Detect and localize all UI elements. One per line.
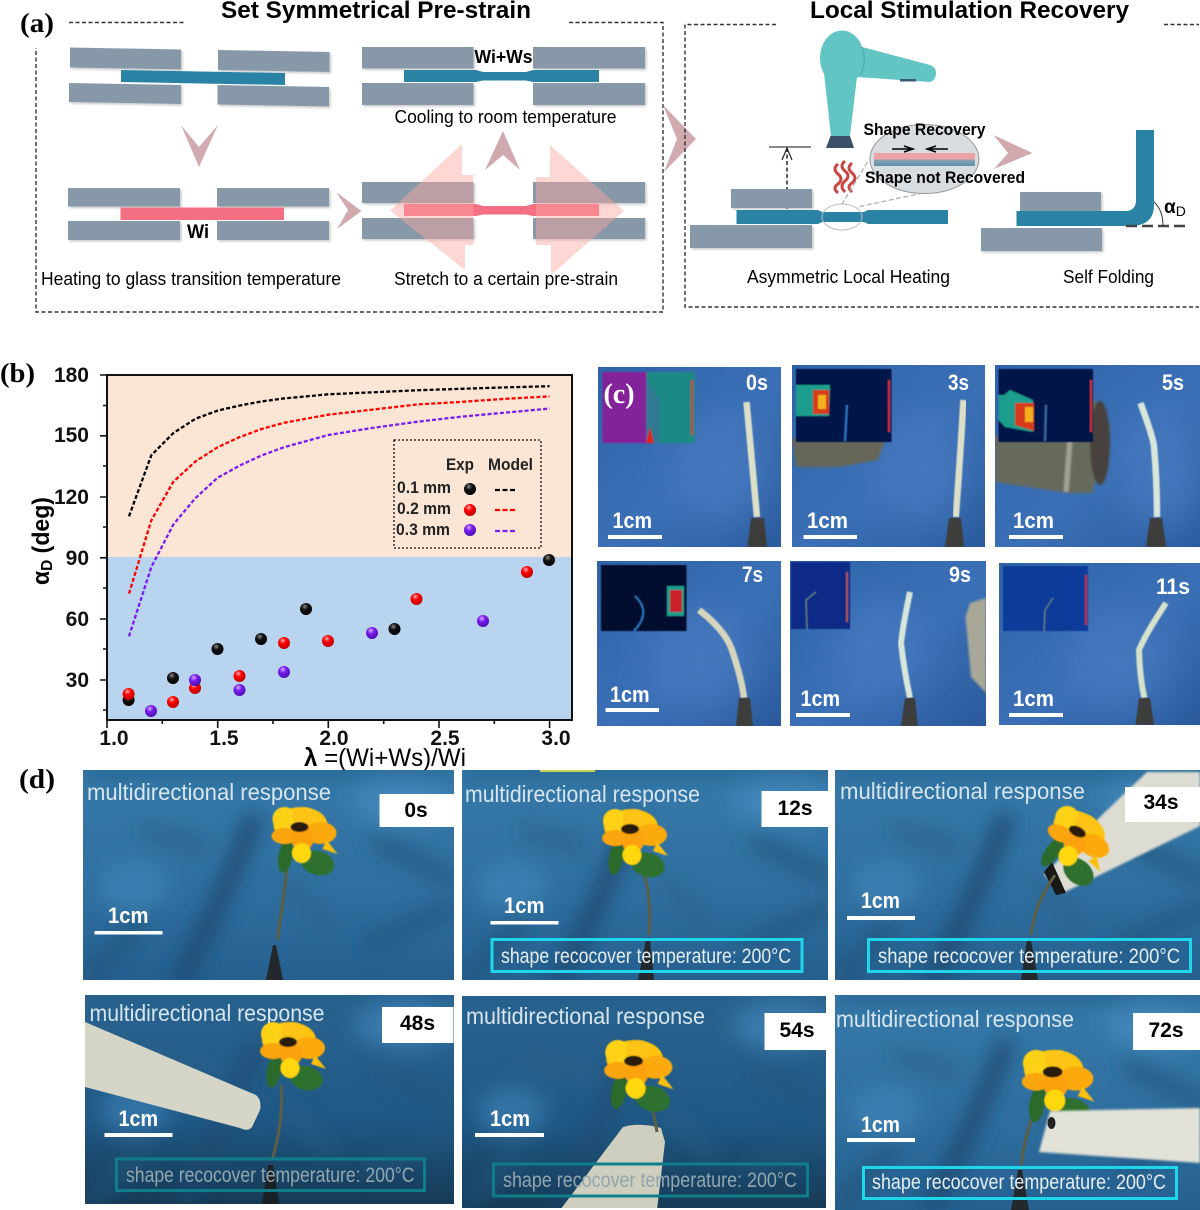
experimental points: 0.2 mm: [123, 566, 533, 708]
panel c: photo 9s: [790, 561, 986, 726]
panel d: photo 72s: multidirectional response: [836, 1006, 1074, 1032]
scale bar: [608, 512, 662, 539]
thermal inset: [1003, 566, 1088, 631]
temperature callout: shape recocover temperature: 200°C: [503, 1169, 797, 1192]
holder: [748, 518, 767, 547]
height marker: [769, 147, 811, 208]
panel d: photo 0s: multidirectional response: [87, 779, 331, 805]
y tick labels: 90: [66, 547, 89, 570]
panel d: photo 34s: [835, 765, 1200, 985]
caption: cooling: Cooling to room temperature: [394, 106, 616, 127]
panel c: photo 11s: [999, 563, 1200, 725]
scale bar: [1009, 690, 1063, 717]
panel label (c): (c): [604, 379, 634, 410]
specimen: [956, 400, 964, 517]
time label: [762, 791, 828, 827]
panel c: photo 3s: [792, 365, 985, 547]
scale bar: 1cm: [108, 903, 148, 928]
step: cooled film: [362, 47, 645, 105]
scale bar: [847, 1112, 915, 1142]
chart: folding angle vs pre-strain: [28, 364, 572, 772]
hot air gun: [560, 1125, 665, 1210]
specimen: [699, 610, 744, 698]
time label: 12s: [777, 797, 813, 820]
panel d: photo 12s: multidirectional response: [465, 781, 700, 807]
specimen: [901, 592, 910, 698]
caption: self folding: Self Folding: [1063, 266, 1154, 287]
holder: [1136, 698, 1154, 725]
scale bar: [847, 888, 915, 920]
time label: [380, 794, 454, 827]
caption: heating: Heating to glass transition temperature: [41, 268, 341, 289]
specimen: [1140, 403, 1157, 517]
scale bar: [804, 512, 857, 539]
caption: asymmetric local heating: Asymmetric Local Heating: [747, 266, 950, 287]
scale bar: [1009, 512, 1063, 539]
temperature callout: shape recocover temperature: 200°C: [126, 1164, 414, 1187]
holder: [901, 698, 918, 726]
step: heated film: [68, 188, 329, 243]
scale bar: [606, 686, 659, 712]
self-folded assembly: D: [1176, 203, 1186, 219]
y tick labels: 120: [54, 486, 89, 509]
scale bar: 1cm: [1013, 686, 1054, 711]
self-folded assembly: α: [1164, 197, 1176, 218]
panel c: photo 5s: [995, 365, 1200, 547]
x axis title: λ =(Wi+Ws)/Wi: [304, 744, 466, 772]
arrow: up chevron: [485, 131, 520, 170]
holder: [945, 518, 964, 547]
flower on bending stem: [1021, 802, 1120, 980]
x tick labels: 1.5: [209, 727, 239, 750]
time label: [764, 1013, 826, 1050]
temperature callout: [116, 1159, 424, 1190]
y tick labels: [54, 364, 89, 692]
x tick labels: [99, 727, 571, 750]
time label: 9s: [949, 562, 971, 587]
panel label (a): (a): [20, 8, 54, 38]
hot air gun: [995, 397, 1110, 493]
panel d: photo 54s: [462, 991, 834, 1210]
time label: 54s: [779, 1019, 815, 1042]
panel d: photo 72s: [835, 990, 1200, 1210]
panel d: photo 0s: [83, 765, 455, 985]
step: stretched film: [362, 144, 645, 275]
time label: 5s: [1162, 370, 1184, 395]
specimen: [1139, 603, 1166, 698]
temperature callout: shape recocover temperature: 200°C: [501, 945, 791, 968]
temperature callout: [494, 1164, 808, 1196]
y axis title: (deg): [28, 497, 55, 560]
flower on bending stem: [1011, 1050, 1094, 1210]
arrow: right chevron: [336, 192, 362, 229]
scale bar: 1cm: [118, 1106, 158, 1131]
hot air gun: [85, 1022, 260, 1130]
panel c: photo 7s: [597, 561, 781, 726]
time label: [1125, 787, 1200, 822]
y axis title: D: [39, 560, 56, 571]
scale bar: 1cm: [807, 508, 848, 533]
magnified detail: Shape not Recovered: [865, 169, 1025, 187]
time label: 7s: [742, 562, 763, 587]
magnified detail: Shape Recovery: [864, 121, 986, 139]
y tick labels: 150: [54, 424, 89, 447]
x tick labels: 2.0: [319, 727, 349, 750]
scale bar: [490, 893, 558, 924]
panel d: photo 48s: [85, 990, 457, 1210]
scale bar: 1cm: [612, 508, 652, 533]
flower on bending stem: [260, 1022, 326, 1204]
asymmetric heating assembly: [690, 189, 948, 248]
y axis title: α: [28, 570, 55, 585]
scale bar: [475, 1106, 544, 1137]
thermal inset: [998, 369, 1093, 442]
low angle region: [107, 557, 572, 720]
self-folded assembly: [981, 130, 1186, 251]
panel d: photo 48s: multidirectional response: [90, 1000, 324, 1026]
temperature callout: [492, 940, 802, 972]
hot air gun: [966, 598, 986, 693]
hot air gun: [792, 438, 886, 467]
time label: [382, 1007, 454, 1043]
panel label (b): (b): [0, 358, 35, 388]
magnified detail: [842, 121, 1025, 207]
scale bar: 1cm: [610, 682, 650, 707]
specimen: [746, 402, 757, 517]
scale bar: [104, 1106, 172, 1137]
axes and ticks: [100, 375, 572, 728]
step: cooled film: Wi+Ws: [474, 47, 532, 67]
hot air gun: [1044, 772, 1200, 895]
scale bar: 1cm: [800, 686, 840, 711]
y tick labels: 180: [54, 364, 89, 387]
experimental points: 0.3 mm: [145, 615, 489, 717]
panel d: photo 34s: multidirectional response: [840, 778, 1085, 804]
scale bar: 1cm: [1013, 508, 1054, 533]
panel c: photo 0s: [598, 367, 781, 547]
temperature callout: [868, 940, 1190, 972]
x tick labels: 1.0: [99, 727, 129, 750]
holder: [736, 698, 753, 726]
scale bar: [94, 903, 162, 934]
arrow: large chevron between schematics: [663, 105, 696, 172]
dashed frame: [685, 24, 1199, 307]
step: heated film: Wi: [187, 222, 209, 243]
panel a: local stimulation recovery: [685, 0, 1199, 307]
time label: 11s: [1156, 574, 1190, 599]
scale bar: 1cm: [504, 893, 544, 918]
legend: 0.3 mm: [396, 521, 450, 539]
legend: 0.2 mm: [397, 500, 451, 518]
legend: Model: [488, 456, 533, 474]
thermal inset: [791, 562, 850, 629]
x tick labels: 2.5: [430, 727, 460, 750]
time label: 0s: [404, 799, 428, 822]
arrow: right chevron: [994, 135, 1032, 169]
flower on bending stem: [604, 1040, 673, 1132]
time label: 48s: [400, 1012, 435, 1035]
time label: 34s: [1143, 791, 1179, 814]
flower on bending stem: [266, 807, 338, 980]
step: initial clamped film: [69, 48, 330, 106]
panel label (d): (d): [19, 764, 55, 794]
high angle region: [107, 375, 572, 557]
time label: 3s: [948, 370, 969, 395]
panel d: photo 54s: multidirectional response: [466, 1003, 705, 1029]
icon: hair dryer: [820, 30, 936, 148]
experimental points: 0.1 mm: [123, 554, 555, 706]
time label: [1133, 1013, 1200, 1050]
scale bar: 1cm: [861, 888, 900, 913]
holder: [1146, 518, 1166, 547]
scale bar: 1cm: [861, 1112, 900, 1137]
hot air gun: [1039, 1108, 1200, 1163]
y tick labels: 60: [66, 608, 89, 631]
legend: [394, 440, 541, 548]
arrow: down chevron: [181, 125, 218, 167]
panel d: photo 12s: [462, 765, 834, 985]
panel a: set symmetrical pre-strain: [36, 0, 663, 312]
flower on bending stem: [602, 809, 668, 980]
icon: heat waves: [835, 161, 855, 193]
model curves: [129, 386, 550, 636]
legend: 0.1 mm: [397, 479, 451, 497]
time label: 0s: [746, 370, 768, 395]
scale bar: [796, 690, 850, 717]
dashed frame: [36, 22, 663, 312]
time label: 72s: [1148, 1019, 1184, 1042]
y tick labels: 30: [66, 669, 89, 692]
caption: stretch: Stretch to a certain pre-strain: [394, 268, 618, 289]
thermal inset: [602, 372, 695, 443]
thermal inset: [796, 369, 892, 442]
x tick labels: 3.0: [541, 727, 571, 750]
scale bar: 1cm: [490, 1106, 530, 1131]
legend: Exp: [446, 456, 474, 474]
thermal inset: [601, 565, 686, 631]
temperature callout: [864, 1168, 1176, 1198]
